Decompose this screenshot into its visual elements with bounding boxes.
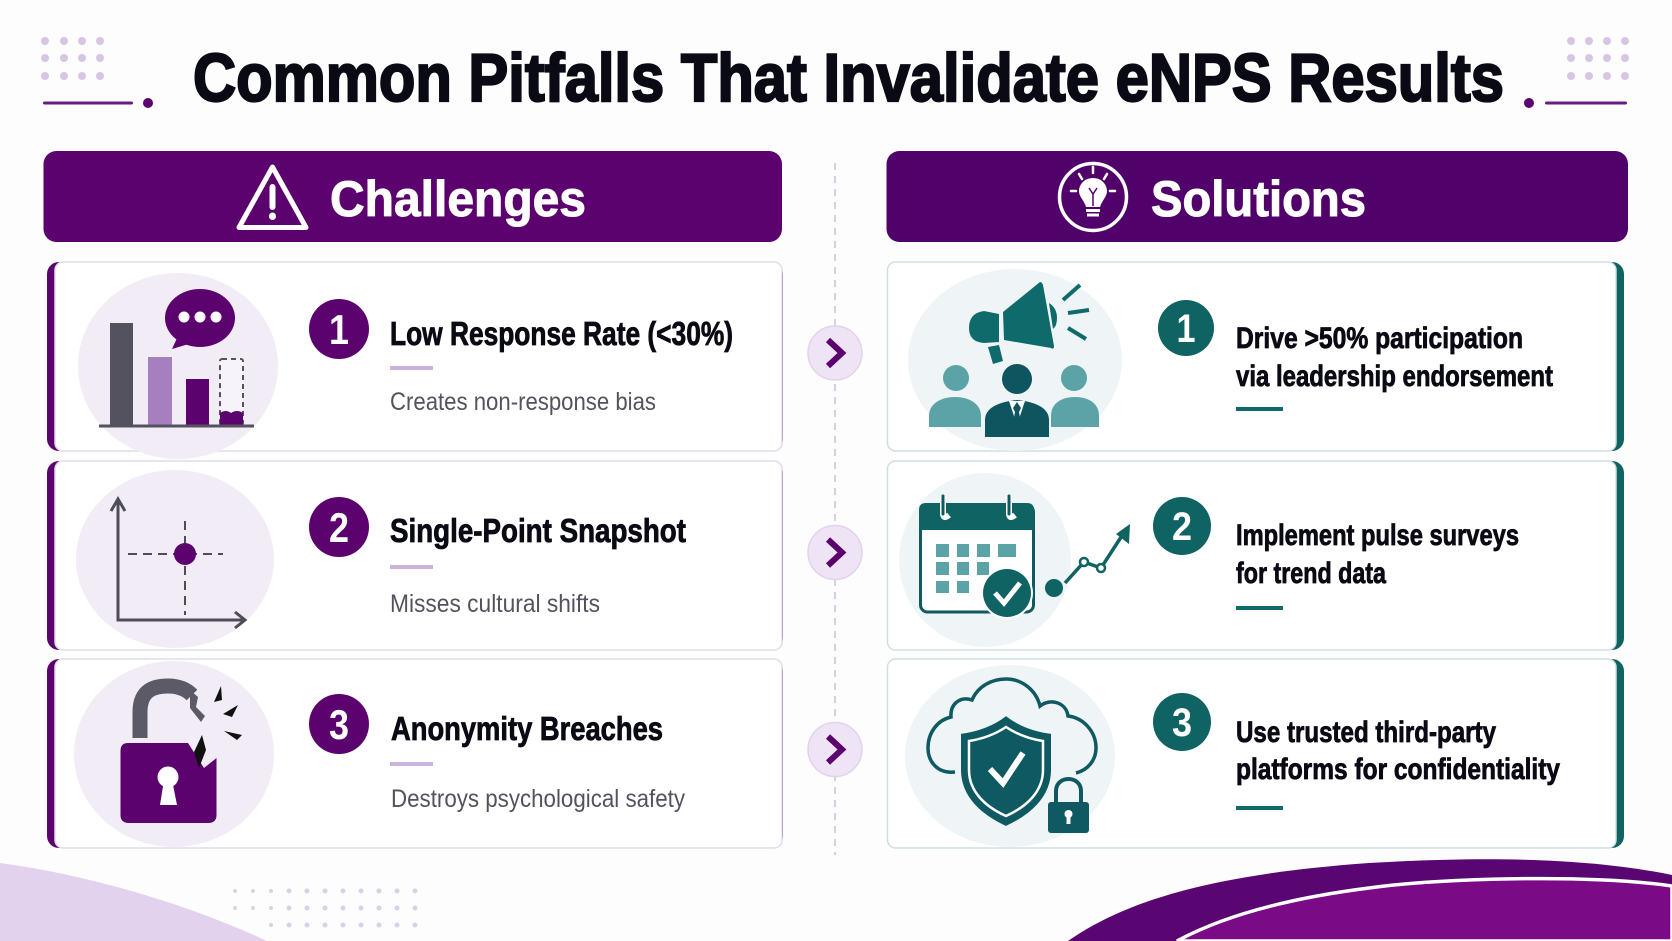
item description: Creates non-response bias: [390, 388, 656, 416]
panel: challenge 2: [47, 461, 783, 650]
number badge 2: [1153, 497, 1211, 555]
header: Solutions: [886, 151, 1628, 242]
rule: [390, 762, 433, 766]
number badge 3: [309, 694, 369, 754]
item description: Misses cultural shifts: [390, 590, 600, 618]
icon: bar chart with speech bubble: [78, 273, 278, 459]
solution text: via leadership endorsement: [1236, 360, 1553, 393]
number badge 1: 1: [329, 306, 349, 353]
solution text: [1236, 322, 1553, 393]
panel: challenge 1: [47, 262, 783, 459]
solution text: Implement pulse surveys: [1236, 519, 1519, 552]
icon: cloud shield and lock: [905, 665, 1115, 847]
arrow 3: [808, 722, 862, 776]
number badge 3: 3: [329, 701, 349, 748]
decoration: top-right dots and rule: [1524, 37, 1629, 108]
panel: solution 2: [887, 461, 1624, 650]
item title: Single-Point Snapshot: [390, 512, 686, 549]
decoration: bottom dot grid: [233, 888, 418, 928]
number badge 3: [1153, 693, 1211, 751]
rule: [390, 366, 433, 370]
number badge 2: 2: [1172, 505, 1192, 549]
decoration: bottom-left lavender curve: [0, 863, 267, 941]
panel: solution 1: [887, 262, 1624, 451]
arrow 1: [808, 326, 862, 380]
rule: [390, 565, 433, 569]
solution text: for trend data: [1236, 557, 1386, 590]
solution text: [1236, 716, 1560, 786]
panel: solution 3: [887, 659, 1624, 848]
icon: warning triangle: [239, 167, 306, 228]
icon: light bulb in circle: [1060, 164, 1126, 230]
solution text: [1236, 519, 1519, 590]
rule: [1236, 407, 1283, 411]
title: Common Pitfalls That Invalidate eNPS Results: [193, 40, 1504, 116]
number badge 1: 1: [1176, 307, 1196, 351]
solution text: Drive >50% participation: [1236, 322, 1523, 355]
number badge 2: 2: [329, 504, 349, 551]
icon: megaphone and people: [908, 269, 1122, 451]
heading: Challenges: Challenges: [330, 171, 586, 227]
solution text: Use trusted third-party: [1236, 716, 1496, 749]
heading: Solutions: Solutions: [1151, 171, 1366, 227]
icon: calendar and trend: [899, 473, 1130, 647]
header: Challenges: [44, 151, 782, 242]
arrow 2: [808, 526, 862, 580]
number badge 3: 3: [1172, 701, 1192, 745]
icon: broken padlock: [74, 661, 274, 847]
center dashed divider: [834, 163, 836, 855]
solution text: platforms for confidentiality: [1236, 753, 1560, 786]
number badge 1: [309, 299, 369, 359]
rule: [1236, 806, 1283, 810]
number badge 2: [309, 497, 369, 557]
number badge 1: [1158, 300, 1214, 356]
decoration: top-left dots and rule: [41, 37, 153, 108]
decoration: bottom-right purple swoosh: [1068, 859, 1672, 941]
rule: [1236, 606, 1283, 610]
icon: chart with a single point: [76, 470, 274, 648]
item title: Low Response Rate (<30%): [390, 315, 733, 352]
item title: Anonymity Breaches: [391, 710, 663, 747]
panel: challenge 3: [47, 659, 783, 848]
item description: Destroys psychological safety: [391, 785, 685, 813]
